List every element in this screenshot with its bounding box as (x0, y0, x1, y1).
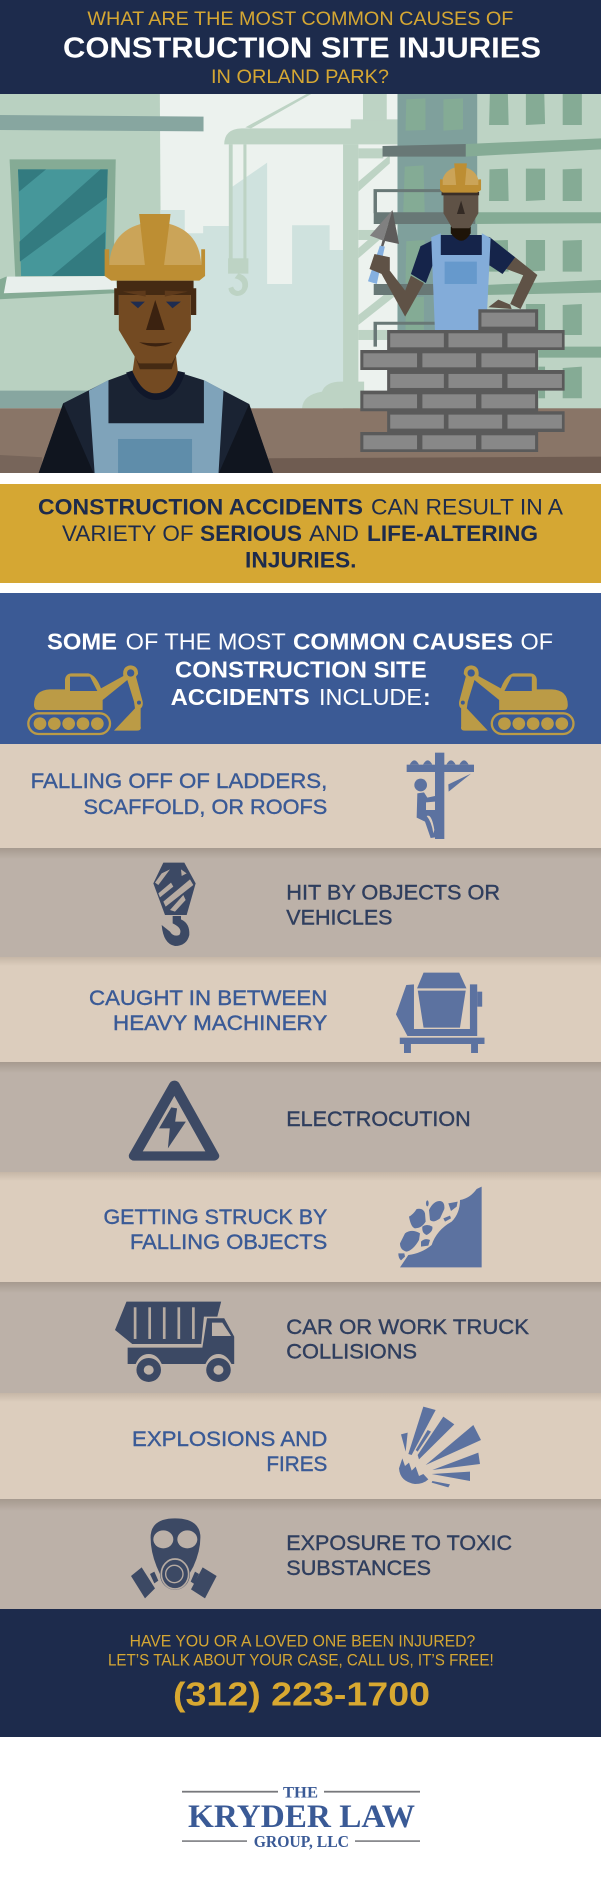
label: explosions: FIRES (266, 1453, 327, 1476)
label: truck collisions: CAR OR WORK TRUCK (286, 1316, 529, 1339)
skyline silhouettes (161, 163, 343, 408)
icon: electric hazard triangle (134, 1085, 214, 1156)
intro text: LIFE-ALTERING (367, 521, 538, 546)
row: hit by objects (0, 848, 601, 957)
row: falling (0, 744, 601, 848)
icon: explosion (399, 1407, 481, 1487)
section heading text: COMMON CAUSES (293, 629, 513, 655)
label: toxic exposure (286, 1532, 512, 1580)
label: hit by objects: HIT BY OBJECTS OR (286, 881, 500, 904)
icon: dump truck (115, 1302, 234, 1382)
label: caught in machinery (89, 987, 327, 1035)
gold intro panel (0, 484, 601, 583)
intro text (38, 495, 563, 573)
call to action text: LET’S TALK ABOUT YOUR CASE, CALL US, IT’S FREE! (108, 1652, 494, 1670)
section heading text (47, 629, 553, 710)
section heading text: ACCIDENTS (171, 684, 310, 710)
label: hit by objects: VEHICLES (286, 906, 392, 929)
intro text: CONSTRUCTION ACCIDENTS (38, 495, 363, 520)
row: toxic exposure (0, 1499, 601, 1609)
left building (0, 94, 204, 408)
section heading text: : (423, 684, 431, 710)
row: truck collisions (0, 1282, 601, 1393)
logo: The Kryder Law Group, LLC (182, 1785, 420, 1851)
ground (0, 382, 601, 474)
phone number: (312) 223-1700 (173, 1675, 430, 1712)
label: falling objects: FALLING OBJECTS (130, 1231, 327, 1254)
section heading text: SOME (47, 629, 117, 655)
logo: The Kryder Law Group, LLC: THE (283, 1785, 318, 1802)
row: falling objects (0, 1172, 601, 1282)
header line one: WHAT ARE THE MOST COMMON CAUSES OF (87, 8, 513, 30)
intro text: CAN RESULT IN A (371, 495, 563, 520)
intro text: VARIETY OF (62, 521, 194, 546)
blue section heading panel (0, 593, 601, 744)
icon: excavator right (459, 665, 573, 734)
icon: gas mask (131, 1518, 217, 1598)
section heading text: INCLUDE (319, 684, 422, 710)
label: caught in machinery: HEAVY MACHINERY (113, 1012, 327, 1035)
intro text: AND (309, 521, 359, 546)
label: truck collisions (286, 1316, 529, 1364)
call to action text: HAVE YOU OR A LOVED ONE BEEN INJURED? (130, 1633, 475, 1651)
illustration: construction workers at building site (0, 94, 601, 474)
section heading text: OF THE MOST (126, 629, 286, 655)
header line three: IN ORLAND PARK? (211, 66, 389, 88)
intro text: SERIOUS (200, 521, 302, 546)
brick wall (360, 309, 565, 452)
right building (374, 94, 601, 411)
icon: crane hook (153, 863, 196, 946)
label: electrocution: ELECTROCUTION (286, 1108, 471, 1131)
row: electrocution (0, 1062, 601, 1172)
section heading text: OF (520, 629, 553, 655)
call to action panel (0, 1609, 601, 1737)
logo: The Kryder Law Group, LLC: KRYDER LAW (188, 1799, 415, 1835)
header title: CONSTRUCTION SITE INJURIES (63, 33, 541, 65)
background worker (368, 163, 537, 333)
icon: cement mixer (396, 973, 484, 1053)
label: falling objects: GETTING STRUCK BY (104, 1206, 327, 1229)
centre tower (398, 94, 478, 330)
logo: The Kryder Law Group, LLC: GROUP, LLC (254, 1832, 349, 1851)
icon: excavator left (28, 665, 143, 734)
label: toxic exposure: EXPOSURE TO TOXIC (286, 1532, 512, 1555)
section heading text: CONSTRUCTION SITE (175, 657, 427, 683)
call to action text (108, 1633, 494, 1670)
icon: rockslide (398, 1187, 482, 1267)
label: explosions: EXPLOSIONS AND (132, 1428, 327, 1451)
row: explosions (0, 1393, 601, 1499)
label: falling objects (104, 1206, 327, 1254)
label: falling: FALLING OFF OF LADDERS, (31, 770, 327, 793)
crane (224, 94, 399, 411)
icon: lineman on pole (407, 753, 474, 839)
label: falling: SCAFFOLD, OR ROOFS (84, 796, 327, 819)
label: truck collisions: COLLISIONS (286, 1341, 417, 1364)
label: hit by objects (286, 881, 500, 929)
label: caught in machinery: CAUGHT IN BETWEEN (89, 987, 327, 1010)
intro text: INJURIES. (245, 548, 356, 573)
label: toxic exposure: SUBSTANCES (286, 1557, 431, 1580)
label: explosions (132, 1428, 327, 1476)
label: falling (31, 770, 327, 819)
foreground worker (38, 214, 273, 474)
row: caught in machinery (0, 957, 601, 1062)
header banner (0, 0, 601, 94)
